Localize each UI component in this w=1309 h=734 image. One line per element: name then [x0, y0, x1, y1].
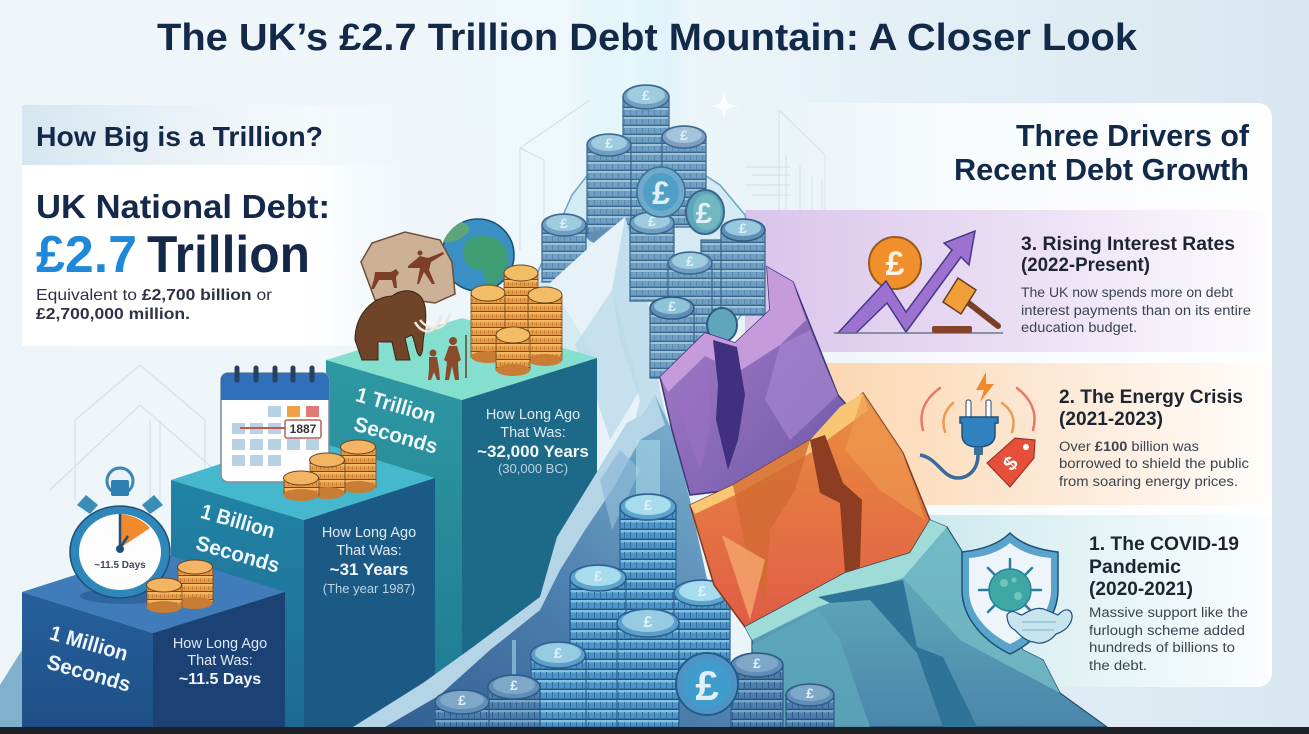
text: equivalent amounts — [36, 287, 273, 323]
stack — [650, 297, 694, 378]
heading: three drivers — [954, 118, 1250, 187]
label: 1 Trillion — [353, 383, 438, 428]
text: equivalent amounts: Equivalent to £2,700 billion or — [36, 287, 273, 304]
text: UK national debt: UK National Debt: — [36, 188, 330, 225]
mountain: lower body — [353, 395, 760, 727]
time label: ~31 Years — [330, 560, 408, 579]
rock layer: teal — [745, 520, 1107, 727]
label — [351, 383, 440, 459]
stack — [721, 219, 765, 315]
time label: That Was: — [500, 425, 566, 441]
time label: How Long Ago — [322, 525, 416, 541]
driver 2: text: 2. The Energy Crisis — [1059, 387, 1243, 408]
stack: £ — [560, 215, 568, 231]
rock layer: orange — [690, 393, 930, 627]
coins: step 1 — [146, 560, 213, 613]
stack — [488, 675, 540, 727]
stack: £ — [458, 692, 466, 708]
driver 2: text: Over £100 billion was — [1059, 439, 1199, 455]
stack: £ — [668, 298, 676, 314]
driver 2: icon plug and price tag — [920, 372, 1035, 487]
driver 3: text — [1021, 234, 1251, 336]
label: Seconds — [351, 413, 440, 459]
time label: (The year 1987) — [323, 581, 415, 596]
heading: three drivers: Recent Debt Growth — [954, 152, 1249, 187]
time label: That Was: — [336, 543, 402, 559]
stack — [674, 580, 730, 683]
driver 2: text — [1059, 387, 1249, 490]
big coin: £ — [652, 175, 670, 211]
driver 1: text: Massive support like the — [1089, 605, 1248, 621]
stack: £ — [753, 655, 761, 671]
panel: three drivers — [745, 103, 1272, 687]
time label — [322, 525, 416, 596]
stack — [662, 126, 706, 227]
driver 3: text: (2022-Present) — [1021, 255, 1150, 276]
stack: £ — [698, 583, 707, 600]
stack: £ — [594, 568, 603, 585]
stack — [668, 252, 712, 343]
title: The UK’s £2.7 Trillion Debt Mountain: A Closer Look — [157, 17, 1138, 59]
stack — [731, 653, 783, 727]
stack — [617, 609, 679, 727]
driver 1: text: furlough scheme added — [1089, 623, 1245, 639]
time label — [477, 407, 589, 476]
label — [193, 500, 282, 578]
driver 2: text: from soaring energy prices. — [1059, 474, 1238, 490]
stack: £ — [686, 253, 694, 269]
heading: how big is a trillion: How Big is a Trillion? — [36, 121, 323, 152]
stack — [701, 240, 745, 310]
driver 2: icon plug and price tag: $ — [999, 452, 1023, 476]
stack: £ — [644, 497, 653, 514]
time label: How Long Ago — [173, 636, 267, 652]
driver 3: text: The UK now spends more on debt — [1021, 285, 1233, 301]
band: COVID-19 — [800, 515, 1271, 687]
big coin: £ — [695, 662, 719, 709]
driver 1: text: hundreds of billions to — [1089, 640, 1235, 656]
icon: globe — [442, 219, 514, 292]
rock layer: purple — [660, 267, 860, 495]
stack — [620, 494, 676, 615]
step 1: 1 million seconds — [22, 550, 285, 727]
stack — [542, 214, 586, 282]
stack: £ — [642, 87, 650, 103]
stack — [530, 642, 586, 727]
time label: (30,000 BC) — [498, 461, 568, 476]
text: equivalent amounts: £2,700,000 million. — [36, 306, 190, 323]
step 2: 1 billion seconds — [171, 437, 435, 727]
driver 3: icon rising chart and gavel: £ — [886, 245, 905, 283]
label: Seconds — [44, 651, 133, 697]
step 3: 1 trillion seconds — [326, 318, 597, 727]
icon: stopwatch — [70, 468, 170, 604]
icon: calendar: 1887 — [290, 422, 317, 436]
icon: mammoth — [355, 291, 450, 360]
big coin — [637, 167, 685, 217]
driver 1: icon shield, virus and mask — [962, 533, 1072, 654]
coins: step 3 — [471, 265, 562, 376]
driver 1: text: 1. The COVID-19 — [1089, 534, 1239, 555]
coin stacks: base — [435, 494, 730, 727]
label: Seconds — [193, 532, 282, 578]
time label: ~32,000 Years — [477, 442, 589, 461]
big coin — [676, 653, 738, 715]
stack: £ — [739, 220, 747, 236]
coin stacks: summit rear — [542, 85, 706, 282]
stack: £ — [806, 685, 814, 701]
time label: That Was: — [187, 653, 253, 669]
driver 2: text: (2021-2023) — [1059, 409, 1163, 430]
stack: £ — [554, 645, 563, 662]
big coin tilted: £ — [696, 198, 712, 230]
coin stacks: base right — [676, 653, 834, 727]
mountain: ice peak — [550, 217, 680, 500]
stack — [786, 684, 834, 727]
stack: £ — [510, 677, 518, 693]
time label: How Long Ago — [486, 407, 580, 423]
stack: £ — [605, 135, 613, 151]
coin stacks: summit front — [630, 167, 765, 378]
stack — [570, 565, 626, 727]
panel: how big is a trillion — [22, 105, 422, 346]
driver 3: text: interest payments than on its entire — [1021, 303, 1251, 319]
stack: £ — [644, 614, 653, 631]
stack — [435, 690, 489, 727]
stack: £ — [680, 127, 688, 143]
stack: £ — [648, 213, 656, 229]
band: rising interest rates — [745, 210, 1271, 352]
label: 1 Million — [47, 622, 130, 666]
coins: step 2 — [284, 440, 376, 501]
band: energy crisis — [800, 363, 1271, 505]
figure: 2.7 trillion: £2.7 — [36, 226, 137, 284]
stack — [630, 212, 674, 301]
driver 1: text: Pandemic — [1089, 557, 1181, 578]
icon: stopwatch: ~11.5 Days — [94, 560, 146, 571]
driver 1: text — [1089, 534, 1248, 674]
stack — [623, 85, 669, 227]
time label: ~11.5 Days — [179, 671, 261, 688]
driver 1: text: the debt. — [1089, 658, 1147, 674]
driver 3: text: 3. Rising Interest Rates — [1021, 234, 1235, 255]
driver 2: text: borrowed to shield the public — [1059, 456, 1249, 472]
label — [44, 622, 133, 697]
figure: 2.7 trillion — [36, 226, 310, 284]
driver 3: text: education budget. — [1021, 320, 1137, 336]
icon: people — [428, 335, 466, 380]
mountain: back ridge — [532, 172, 760, 370]
driver 3: icon rising chart and gavel — [834, 231, 1003, 333]
heading: three drivers: Three Drivers of — [1016, 118, 1250, 153]
small mountain, far left — [0, 640, 40, 727]
icon: cave painting rock — [361, 232, 455, 303]
big coin tilted — [686, 190, 724, 234]
icon: calendar — [221, 368, 329, 482]
stack — [587, 134, 631, 245]
figure: 2.7 trillion: Trillion — [147, 226, 310, 284]
time label — [173, 636, 267, 688]
label: 1 Billion — [198, 500, 277, 543]
driver 1: text: (2020-2021) — [1089, 579, 1193, 600]
